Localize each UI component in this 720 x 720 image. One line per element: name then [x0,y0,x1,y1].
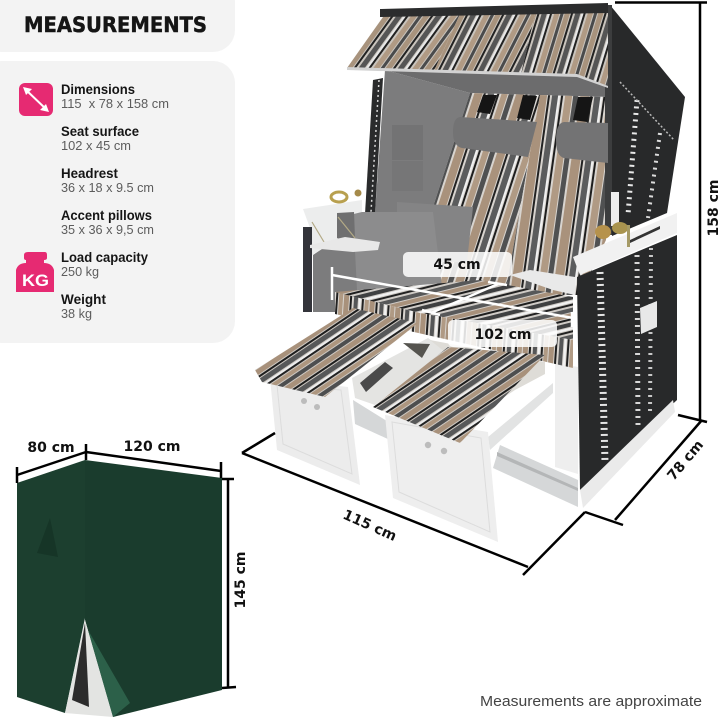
spec: accent pillows [61,208,154,237]
cover: opening [65,620,113,717]
cover: left face [17,460,85,713]
spec: weight: Weight [61,292,107,307]
spec: weight [61,292,107,321]
chair: striped seat top [335,280,573,340]
label: 45 cm [403,252,512,277]
chair: white latch plate [640,301,657,334]
chair: storage pockets [392,125,423,191]
spec: weight: 38 kg [61,307,92,321]
cover: right face [85,460,222,717]
spec: headrest: Headrest [61,166,118,181]
spec: dimensions [61,82,169,111]
spec: accent pillows: Accent pillows [61,208,152,223]
chair: headrest right [556,122,608,163]
icon: load weight KG: KG [22,271,49,290]
chair: base white band [580,400,675,508]
label: 45 cm: 45 cm [433,257,481,273]
spec: dimensions: 115 x 78 x 158 cm [61,97,169,111]
chair: ceiling lining [385,70,608,97]
label: 78 cm: 78 cm [664,437,707,484]
title: MEASUREMENTS [24,13,207,38]
seat depth measure line 45 cm [422,282,507,315]
label: 80 cm: 80 cm [27,440,75,456]
spec: seat surface [61,124,139,153]
title panel [0,0,235,52]
spec: seat surface: 102 x 45 cm [61,139,131,153]
chair: accent pillow front [353,212,442,290]
label: 102 cm: 102 cm [475,327,531,343]
chair: footstool left top [255,308,418,397]
icon: load weight KG [16,252,54,292]
chair: accent pillow back [397,202,473,262]
label: 145 cm: 145 cm [233,552,249,608]
chair: footstool right top [373,347,545,443]
chair: base rails and posts [353,363,578,507]
chair: left arm rest [303,190,380,312]
label: 115 cm: 115 cm [340,507,399,545]
spec: headrest [61,166,154,195]
spec: dimensions: Dimensions [61,82,135,97]
spec: load capacity: Load capacity [61,250,148,265]
footnote: Measurements are approximate [480,693,702,710]
chair: leg screw dots [301,398,447,454]
dimension line: cover 80 cm [17,444,86,483]
chair: headrest left [453,117,537,157]
chair: white support right [385,415,498,542]
icon: dimensions arrows [19,83,53,116]
dimension line: chair depth 78 cm [523,415,707,575]
chair: interior back wall [313,70,470,312]
chair: under-seat frame [352,338,545,405]
chair: white support left [270,378,360,485]
dimension line: chair width 115 cm [242,433,528,567]
dimension line: cover 120 cm [86,452,221,478]
chair: right side shelf [510,270,575,295]
label: 102 cm [448,320,557,347]
chair: striped backrest [420,93,608,295]
cover: folded flap [88,630,130,717]
panel: specifications [0,61,235,343]
chair: striped seat front band [335,292,573,368]
chair: striped canopy [347,3,608,88]
protective cover illustration [17,460,222,717]
spec: accent pillows: 35 x 36 x 9,5 cm [61,223,154,237]
seat width measure line 102 cm [332,267,573,327]
beach chair illustration [255,3,685,542]
chair: right lower wicker wall [577,235,677,490]
spec: load capacity: 250 kg [61,265,99,279]
chair: left side edge [365,78,383,214]
label: 120 cm: 120 cm [124,439,180,455]
chair: right upper wicker wall [605,5,685,236]
spec: seat surface: Seat surface [61,124,139,139]
spec: load capacity [61,250,148,279]
dimension line: cover 145 cm [222,479,236,688]
dimension line: chair height 158 cm [615,2,707,421]
chair: white arm rest right [573,192,677,275]
cover: pocket [37,518,58,557]
spec: headrest: 36 x 18 x 9.5 cm [61,181,154,195]
